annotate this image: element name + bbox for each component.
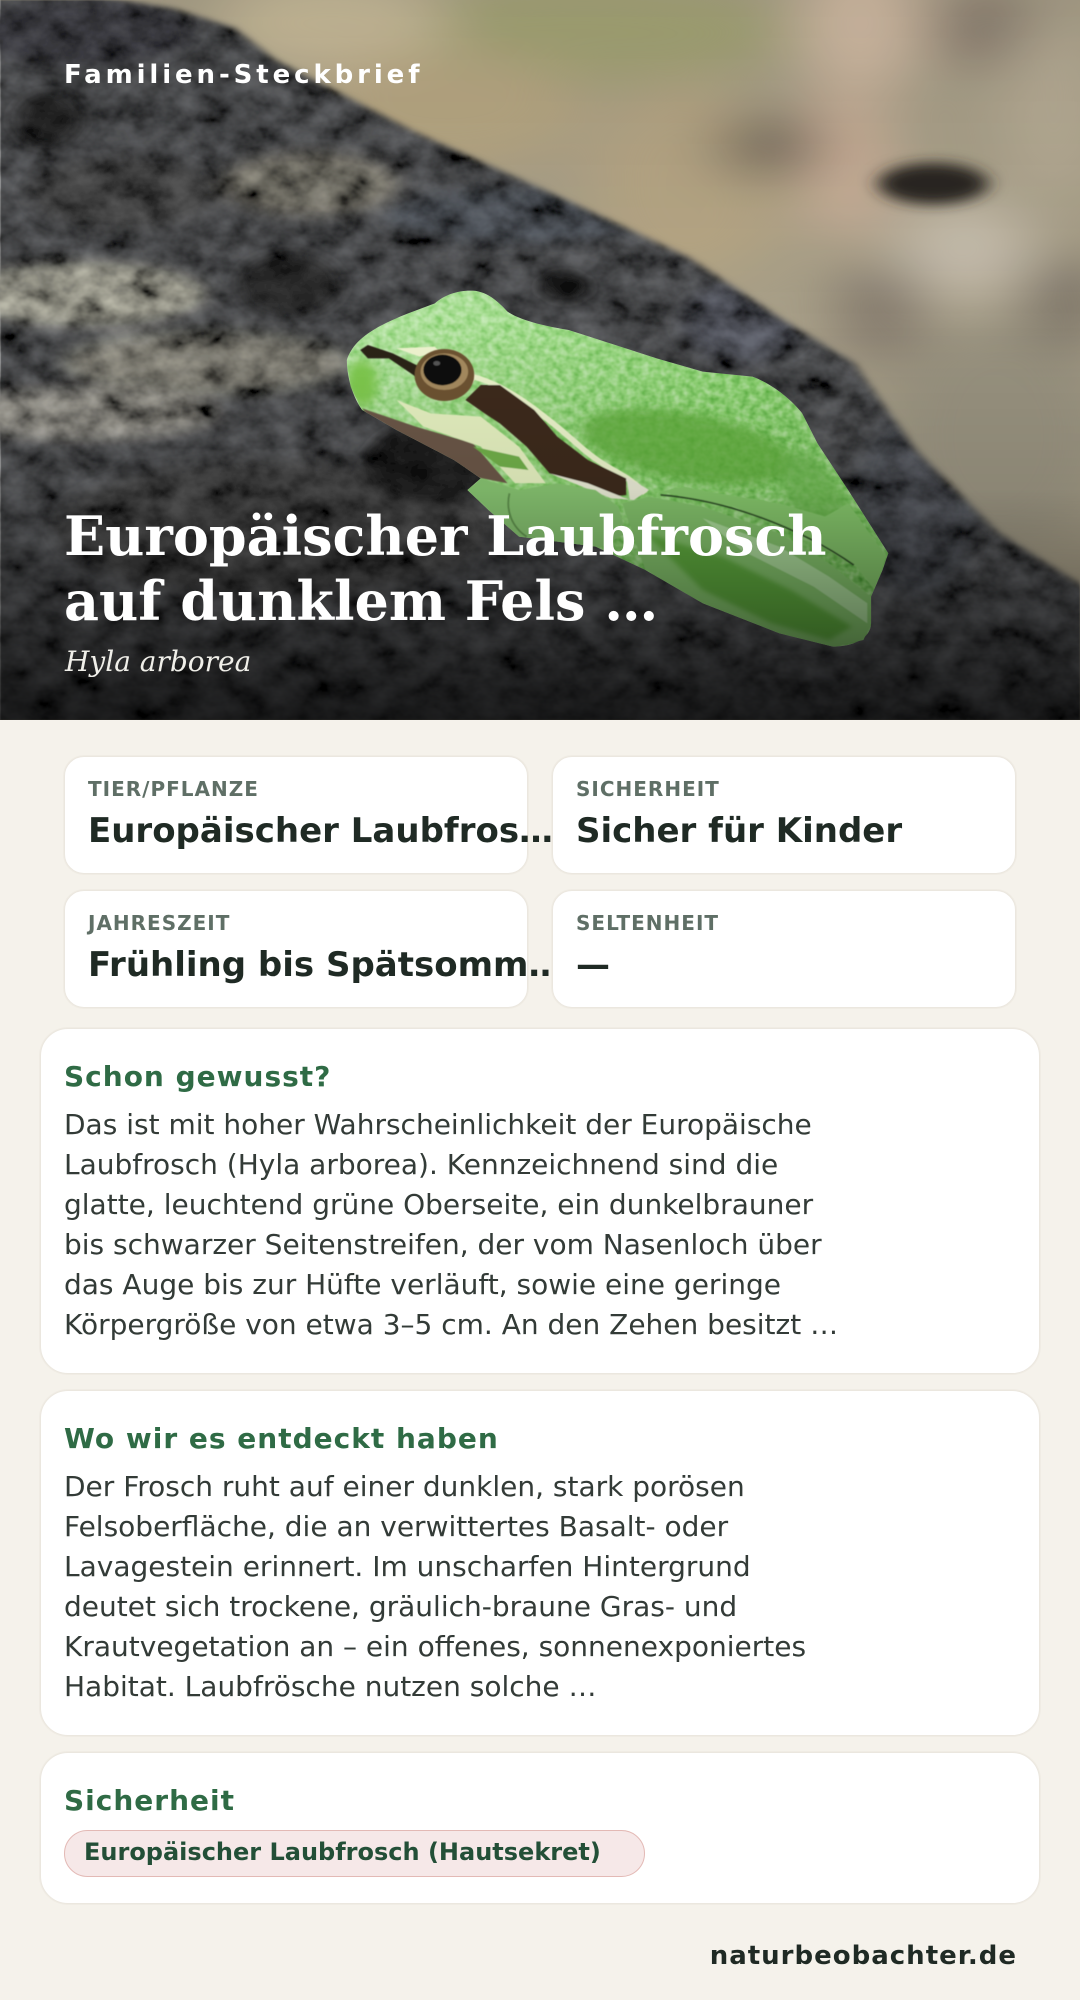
thigh ridge <box>661 487 886 590</box>
title <box>64 504 827 633</box>
arm <box>467 478 626 550</box>
panel: Wo wir es entdeckt haben <box>40 1390 1040 1736</box>
side stripe <box>473 377 645 493</box>
text: Wo wir es entdeckt haben: Der Frosch ruht auf einer dunklen, stark porösen <box>64 1470 745 1503</box>
warning pill: Europäischer Laubfrosch (Hautsekret) <box>84 1838 601 1866</box>
fact card: Seltenheit <box>552 890 1016 1008</box>
title: Europäischer Laubfrosch <box>64 504 827 568</box>
nose stripe <box>360 345 420 377</box>
text: Wo wir es entdeckt haben: Felsoberfläche, die an verwittertes Basalt- oder <box>64 1510 728 1543</box>
text: Wo wir es entdeckt haben: Krautvegetation an – ein offenes, sonnenexponiertes <box>64 1630 806 1663</box>
heading: Sicherheit: Sicherheit <box>64 1784 235 1817</box>
text: Wo wir es entdeckt haben: deutet sich trockene, gräulich-braune Gras- und <box>64 1590 737 1623</box>
fact card: Seltenheit: SELTENHEIT <box>576 911 719 935</box>
panel: Schon gewusst <box>40 1028 1040 1374</box>
lower flank and mouth <box>362 408 508 483</box>
text: Schon gewusst: Körpergröße von etwa 3–5 cm. An den Zehen besitzt … <box>64 1308 838 1341</box>
fact card: Tier/Pflanze <box>64 756 528 874</box>
title: auf dunklem Fels … <box>64 569 658 633</box>
text: Wo wir es entdeckt haben <box>64 1470 806 1703</box>
text: Schon gewusst: bis schwarzer Seitenstreifen, der vom Nasenloch über <box>64 1228 822 1261</box>
frog eye <box>415 349 474 401</box>
heading: Schon gewusst: Schon gewusst? <box>64 1060 331 1093</box>
frog <box>347 291 888 647</box>
text: Schon gewusst <box>64 1108 838 1341</box>
fact card: Tier/Pflanze: TIER/PFLANZE <box>88 777 259 801</box>
scientific name: Hyla arborea <box>65 645 251 678</box>
text: Wo wir es entdeckt haben: Habitat. Laubfrösche nutzen solche … <box>64 1670 597 1703</box>
fact card: Tier/Pflanze: Europäischer Laubfros… <box>88 811 553 851</box>
rock <box>0 0 1080 720</box>
fact card: Sicherheit: SICHERHEIT <box>576 777 720 801</box>
text: Schon gewusst: Das ist mit hoher Wahrscheinlichkeit der Europäische <box>64 1108 812 1141</box>
hero photo: frog on dark rock <box>0 0 1080 720</box>
hind leg <box>622 497 871 647</box>
text: Schon gewusst: Laubfrosch (Hyla arborea). Kennzeichnend sind die <box>64 1148 778 1181</box>
fact card: Sicherheit <box>552 756 1016 874</box>
fact card: Seltenheit: — <box>576 945 610 985</box>
photo shading gradient <box>0 0 1080 720</box>
heading: Wo wir es entdeckt haben: Wo wir es entdeckt haben <box>64 1422 499 1455</box>
footer brand: naturbeobachter.de <box>710 1941 1017 1971</box>
text: Wo wir es entdeckt haben: Lavagestein erinnert. Im unscharfen Hintergrund <box>64 1550 751 1583</box>
warning pill <box>64 1830 645 1877</box>
text: Schon gewusst: glatte, leuchtend grüne Oberseite, ein dunkelbrauner <box>64 1188 813 1221</box>
fact card: Jahreszeit: JAHRESZEIT <box>88 911 230 935</box>
panel: Sicherheit <box>40 1752 1040 1904</box>
frog body <box>347 291 888 647</box>
text: Schon gewusst: das Auge bis zur Hüfte verläuft, sowie eine geringe <box>64 1268 781 1301</box>
fact card: Sicherheit: Sicher für Kinder <box>576 811 902 851</box>
background: blurred vegetation <box>0 0 1080 720</box>
fact card: Jahreszeit: Frühling bis Spätsomm… <box>88 945 562 985</box>
eyebrow label: Familien-Steckbrief <box>64 60 423 90</box>
fact card: Jahreszeit <box>64 890 528 1008</box>
